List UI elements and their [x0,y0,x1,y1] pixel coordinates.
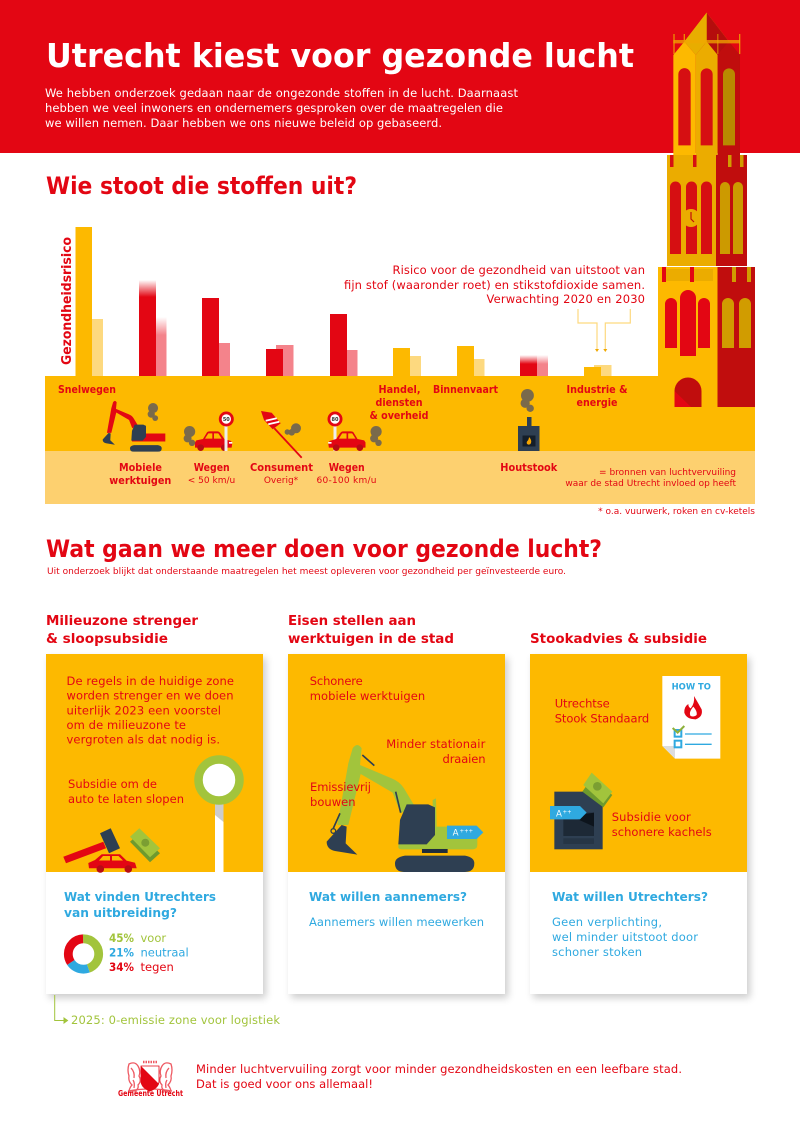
donut legend: neutraal [140,946,189,960]
icon: crushed car [88,854,137,873]
intro text: We hebben onderzoek gedaan naar de ongezonde stoffen in de lucht. Daarnaast [45,86,518,100]
source labels lower: 60-100 km/u [316,476,376,486]
bar chart [76,227,612,376]
card question: Wat vinden Utrechters [64,889,216,904]
card answer: Aannemers willen meewerken [309,915,484,929]
icon: money on stove [582,773,612,807]
band note: waar de stad Utrecht invloed op heeft [565,479,736,489]
icon: firework rocket [261,411,302,458]
intro text: hebben we veel inwoners en ondernemers gesproken over de maatregelen die [45,101,503,115]
donut legend [109,931,189,974]
card text: regels [66,674,234,747]
icon: sign 50 [219,412,234,451]
y axis label: Gezondheidsrisico [59,237,75,365]
column heading 2 [288,613,454,647]
icon: wood stove [518,417,540,451]
card text: emissievrij: Emissievrij [310,780,371,794]
icon: car 80 [328,431,366,451]
card text: stook standaard: Utrechtse [555,697,610,711]
source labels lower: < 50 km/u [188,476,235,486]
band note [565,468,736,489]
risk explanation: Verwachting 2020 en 2030 [486,292,645,306]
icon: large excavator [327,745,483,872]
card text: emissievrij: bouwen [310,795,356,809]
source labels upper: Binnenvaart [433,384,498,396]
donut chart [68,939,99,969]
donut legend: voor [140,931,166,945]
icon: firework smoke [285,423,301,436]
card text: subsidie: auto te laten slopen [68,792,184,806]
card text: regels: om de milieuzone te [66,718,186,732]
icon: small excavator [103,401,165,452]
source labels lower: Overig* [264,476,299,486]
card text: regels: De regels in de huidige zone [66,674,234,688]
card question: van uitbreiding? [64,905,177,920]
icon: clean stove with label: ++ [563,810,572,816]
source labels lower: Houtstook [500,462,558,474]
donut legend: 34% [109,960,134,974]
source labels lower [109,462,558,487]
2025 note: 2025: 0-emissie zone voor logistiek [71,1013,280,1027]
card text: schonere: Schonere [310,674,363,688]
source labels upper: Handel, [378,384,420,396]
intro text: we willen nemen. Daar hebben we ons nieuwe beleid op gebaseerd. [45,116,442,130]
donut legend: 45% [109,931,134,945]
panel: werktuigen [288,654,508,998]
icon: clean stove with label [550,792,603,849]
closing text [196,1062,682,1091]
tower [658,13,755,451]
column heading 2: werktuigen in de stad [288,631,454,647]
icon: smoke 50 [184,426,195,446]
icon: sign 80: 80 [332,417,339,423]
closing text: Dat is goed voor ons allemaal! [196,1077,373,1091]
risk explanation: fijn stof (waaronder roet) en stikstofdioxide samen. [344,278,645,292]
source labels lower: Wegen [329,462,365,474]
card text: regels: vergroten als dat nodig is. [66,733,220,747]
ground band [45,376,755,452]
icon: stove smoke [521,389,534,412]
column heading 1: Milieuzone strenger [46,613,198,629]
card answer: wel minder uitstoot door [552,930,698,944]
source labels upper: diensten [376,397,422,409]
card question: Wat willen aannemers? [309,889,467,904]
card text: stationair: draaien [442,752,486,766]
source labels lower: werktuigen [109,475,171,487]
card text: schonere [310,674,425,703]
heading: wat gaan we doen: Wat gaan we meer doen voor gezonde lucht? [46,535,602,563]
icon: money [130,828,160,862]
card text: stationair: Minder stationair [386,737,486,751]
risk explanation: Risico voor de gezondheid van uitstoot van [392,263,645,277]
card text: stook standaard: Stook Standaard [555,712,649,726]
icon: zone sign [198,760,240,872]
icon: sign 80 [328,412,342,451]
icon: smoke 80 [370,426,382,446]
icon: excavator smoke [148,403,158,421]
heading: wie stoot: Wie stoot die stoffen uit? [46,172,357,200]
card answer [552,915,698,959]
card question [64,889,216,920]
source labels upper [58,384,628,422]
icon: clean stove with label: A [556,809,562,819]
source labels lower: Consument [250,462,313,474]
subheading: Uit onderzoek blijkt dat onderstaande maatregelen het meest opleveren voor gezondheid per geïnvesteerde euro. [47,567,566,577]
icon: large excavator: +++ [460,829,473,835]
panel: stookadvies [530,654,750,998]
arrow: 2025 [55,995,68,1023]
closing text: Minder luchtvervuiling zorgt voor minder gezondheidskosten en een leefbare stad. [196,1062,682,1076]
column heading 3: Stookadvies & subsidie [530,631,707,647]
card text: stook standaard [555,697,649,726]
source labels lower: Wegen [194,462,230,474]
column heading 2: Eisen stellen aan [288,613,416,629]
card answer: Geen verplichting, [552,915,662,929]
lower band [45,451,755,504]
icon: how-to document: HOW TO [672,682,711,692]
source labels upper: Industrie & [566,384,628,396]
column heading 1 [46,613,198,647]
source labels upper: energie [576,397,618,409]
card text: schonere: mobiele werktuigen [310,689,425,703]
column heading 1: & sloopsubsidie [46,631,168,647]
source labels upper: Snelwegen [58,384,116,396]
card text: subsidie kachels: schonere kachels [612,825,712,839]
risk explanation [344,263,645,306]
icon: car 50 [195,431,232,451]
icon: hammer [63,828,120,863]
card question: Wat willen Utrechters? [552,889,708,904]
card text: subsidie kachels: Subsidie voor [612,810,691,824]
card answer: schoner stoken [552,945,642,959]
header band [0,0,800,153]
legend arrows [578,309,630,352]
title: Utrecht kiest voor gezonde lucht [46,36,634,75]
source labels upper: & overheid [370,410,428,422]
card text: subsidie: Subsidie om de [68,777,157,791]
donut legend: tegen [140,960,174,974]
source labels lower: Mobiele [119,462,162,474]
card text: emissievrij [310,780,371,809]
card text: stationair [386,737,486,766]
icon: how-to document [662,676,720,759]
logo: Gemeente Utrecht [118,1062,183,1098]
donut legend: 21% [109,946,134,960]
card text: regels: uiterlijk 2023 een voorstel [66,703,221,717]
footnote: * o.a. vuurwerk, roken en cv-ketels [598,507,755,517]
icon: large excavator: A [453,828,459,838]
card text: regels: worden strenger en we doen [66,689,234,703]
panel: milieuzone [46,654,266,998]
logo: Gemeente Utrecht: Gemeente Utrecht [118,1089,183,1098]
icon: sign 50: 50 [223,417,230,423]
card text: subsidie kachels [612,810,712,839]
intro text [45,86,518,130]
band note: = bronnen van luchtvervuiling [599,468,736,478]
card text: subsidie [68,777,184,806]
